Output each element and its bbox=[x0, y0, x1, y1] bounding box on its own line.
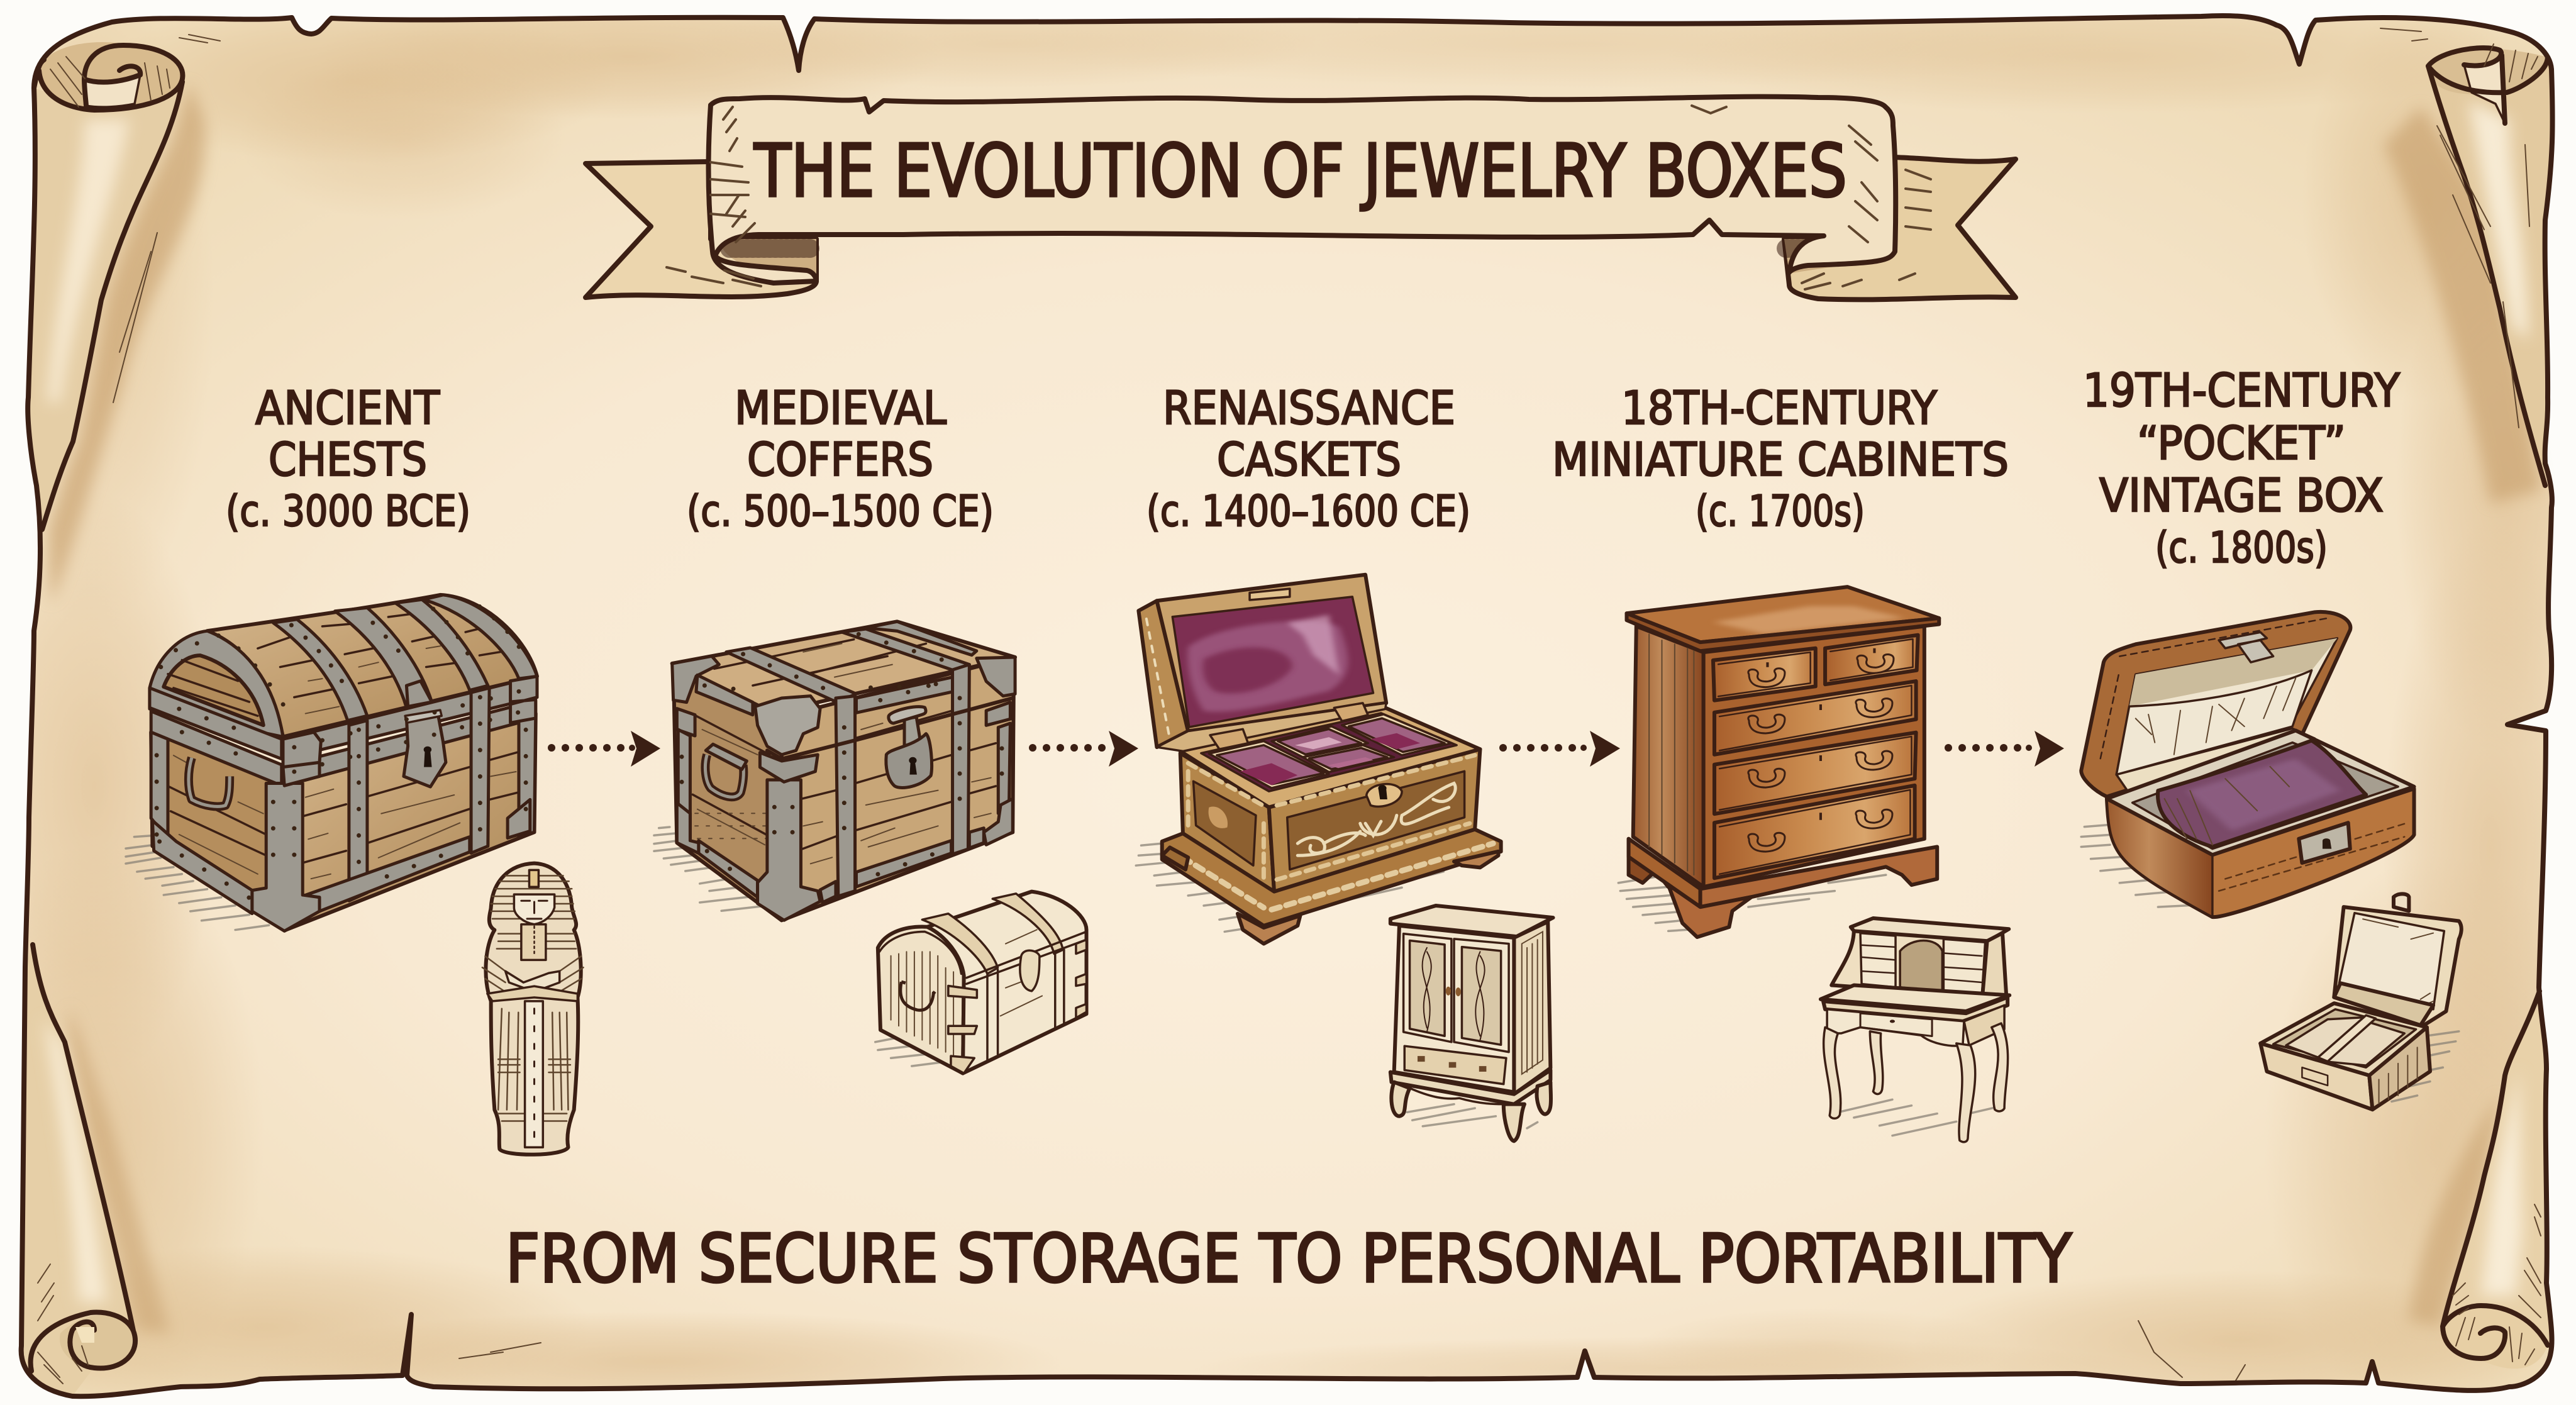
label: 18th-century miniature cabinets: (c. 1700s) bbox=[1696, 487, 1865, 536]
renaissance casket bbox=[1136, 575, 1501, 944]
label: ancient chests: CHESTS bbox=[269, 433, 427, 487]
label: 18th-century miniature cabinets: MINIATURE CABINETS bbox=[1552, 433, 2009, 487]
label: 18th-century miniature cabinets: 18TH-CENTURY bbox=[1621, 382, 1938, 435]
small armoire cabinet bbox=[1391, 906, 1553, 1141]
label: renaissance caskets bbox=[1146, 382, 1470, 536]
label: renaissance caskets: CASKETS bbox=[1217, 433, 1401, 487]
label: 19th-century pocket vintage box: (c. 1800s) bbox=[2155, 523, 2328, 573]
18th-century chest of drawers bbox=[1618, 587, 1939, 937]
ancient chest bbox=[126, 595, 537, 931]
medieval coffer bbox=[654, 621, 1015, 920]
label: 19th-century pocket vintage box bbox=[2083, 364, 2401, 573]
arrow 3 bbox=[1499, 731, 1620, 767]
label: renaissance caskets: RENAISSANCE bbox=[1163, 382, 1455, 435]
label: ancient chests bbox=[226, 382, 470, 536]
footer tagline: FROM SECURE STORAGE TO PERSONAL PORTABILITY bbox=[506, 1220, 2072, 1297]
label: medieval coffers bbox=[687, 382, 994, 536]
label: renaissance caskets: (c. 1400–1600 CE) bbox=[1146, 487, 1470, 536]
label: ancient chests: (c. 3000 BCE) bbox=[226, 487, 470, 536]
decorative shade along scroll inner lines bbox=[48, 82, 205, 604]
scroll: top-right curl bbox=[2380, 28, 2553, 486]
small open box bbox=[2260, 894, 2462, 1109]
arrow 4 bbox=[1945, 731, 2064, 767]
scroll: top-left curl bbox=[28, 35, 220, 562]
title text: THE EVOLUTION OF JEWELRY BOXES bbox=[753, 129, 1847, 214]
label: ancient chests: ANCIENT bbox=[255, 382, 440, 435]
small sarcophagus bbox=[482, 864, 584, 1155]
19th-century pocket box bbox=[2081, 612, 2414, 917]
arrow 2 bbox=[1029, 731, 1138, 767]
small dome trunk bbox=[875, 892, 1086, 1074]
scroll: bottom-left curl bbox=[21, 945, 541, 1396]
arrow 1 bbox=[548, 731, 660, 767]
scroll: bottom-right curl bbox=[2138, 987, 2552, 1380]
label: 19th-century pocket vintage box: 19TH-CENTURY bbox=[2083, 364, 2401, 418]
label: 18th-century miniature cabinets bbox=[1552, 382, 2009, 536]
label: 19th-century pocket vintage box: “POCKET” bbox=[2137, 417, 2346, 470]
small writing bureau bbox=[1821, 918, 2009, 1142]
label: medieval coffers: COFFERS bbox=[747, 433, 933, 487]
title banner bbox=[586, 97, 2016, 299]
label: medieval coffers: MEDIEVAL bbox=[735, 382, 947, 435]
label: medieval coffers: (c. 500–1500 CE) bbox=[687, 487, 994, 536]
label: 19th-century pocket vintage box: VINTAGE BOX bbox=[2099, 469, 2384, 523]
